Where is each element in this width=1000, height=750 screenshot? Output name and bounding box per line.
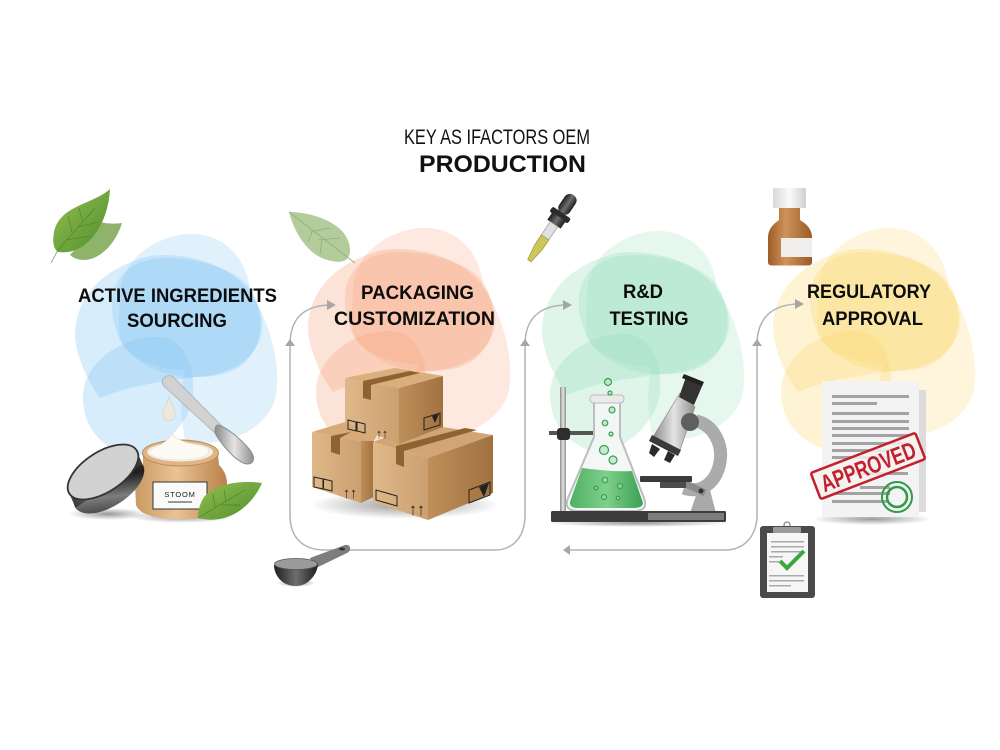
top box [345, 368, 443, 444]
icon: spatula [162, 376, 254, 464]
icon: clipboard with check [760, 522, 815, 598]
title [404, 126, 590, 178]
panel: regulatory approval [768, 188, 975, 525]
yellow blob background [773, 228, 975, 451]
heading: R&D testing: TESTING [610, 309, 688, 330]
title: PRODUCTION [419, 151, 586, 178]
heading: regulatory approval: APPROVAL [822, 309, 923, 330]
heading: regulatory approval: REGULATORY [807, 282, 931, 303]
icon: microscope [640, 374, 721, 513]
heading: active ingredients sourcing [78, 286, 277, 332]
icon: lab base [546, 511, 730, 527]
icon: ring stand [549, 387, 594, 513]
icon: pale leaf [289, 212, 355, 263]
orange blob background [308, 228, 510, 451]
heading: R&D testing: R&D [623, 282, 663, 303]
arrow: packaging to testing [520, 300, 572, 515]
green seal [882, 482, 912, 512]
connector arrows [285, 299, 804, 555]
arrow: approval back to testing [563, 299, 804, 555]
title: KEY AS IFACTORS OEM [404, 126, 590, 149]
icon: measuring scoop [274, 545, 350, 587]
panel: packaging customization [289, 212, 510, 520]
approved stamp [811, 433, 926, 500]
icon: amber bottle [768, 188, 812, 266]
green blob background [542, 231, 744, 454]
icon: approved document [811, 381, 932, 525]
right box [373, 427, 493, 520]
heading: packaging customization: PACKAGING [361, 283, 474, 304]
icon: green leaves [51, 189, 122, 263]
panel: R&D testing [520, 189, 744, 527]
heading: active ingredients sourcing: ACTIVE INGREDIENTS [78, 286, 277, 307]
icon: small leaf [198, 482, 262, 520]
heading: packaging customization: CUSTOMIZATION [334, 309, 495, 330]
panel: active ingredients sourcing [51, 189, 277, 525]
jar label: STOOM [164, 490, 196, 499]
heading: active ingredients sourcing: SOURCING [127, 311, 227, 332]
right box: ↑↑ [409, 500, 425, 519]
icon: jar lid [59, 433, 153, 525]
approved stamp: APPROVED [817, 437, 920, 498]
icon: dropper [520, 189, 583, 267]
heading: R&D testing [610, 282, 688, 330]
top box: ↑↑ [376, 426, 388, 441]
icon: cream jar [130, 433, 234, 523]
left box [312, 422, 378, 503]
icon: cream drop [163, 397, 175, 421]
green check [780, 551, 804, 568]
icon: erlenmeyer flask [567, 378, 645, 511]
blue blob background [75, 234, 277, 457]
heading: regulatory approval [807, 282, 931, 330]
heading: packaging customization [334, 283, 495, 330]
arrow: sourcing to packaging [285, 300, 525, 550]
left box: ↑↑ [343, 485, 357, 502]
icon: cardboard boxes [310, 368, 500, 520]
